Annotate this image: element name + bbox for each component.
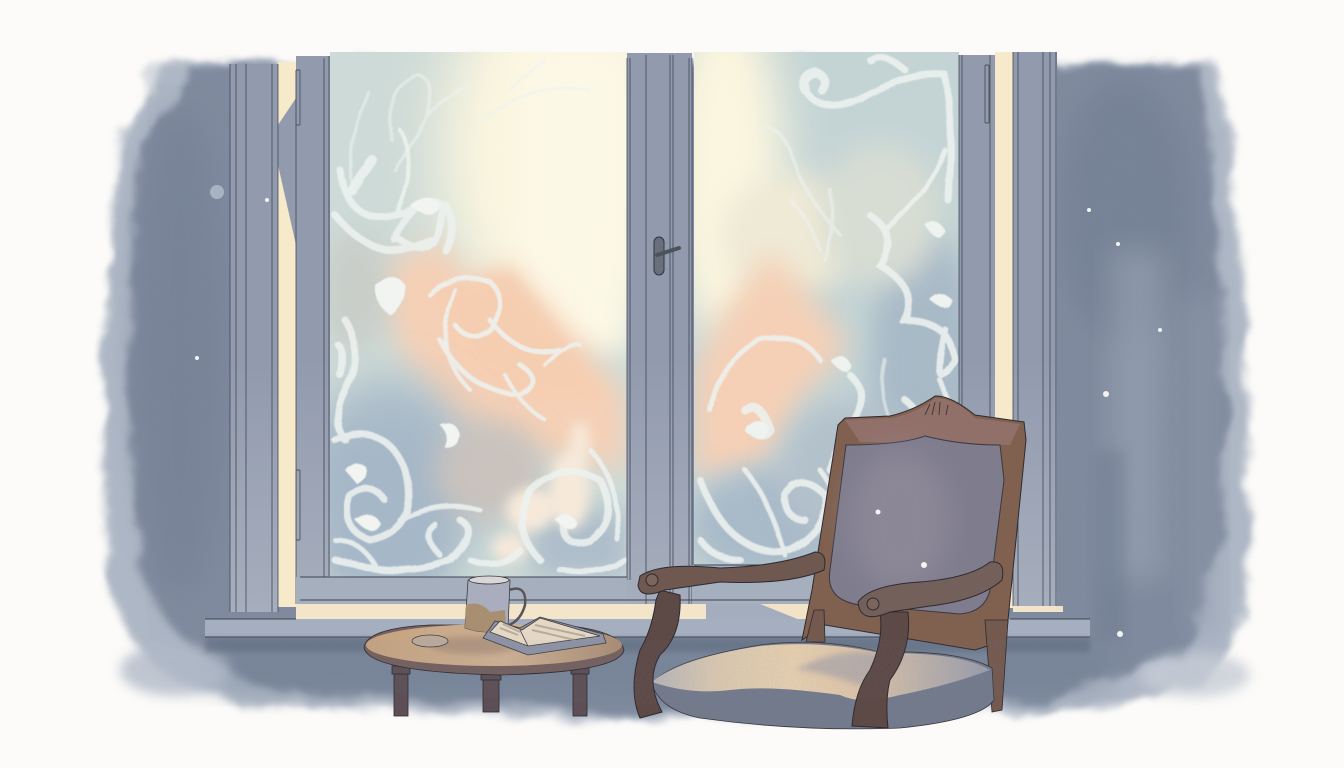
bottom rail of window [296, 565, 960, 605]
steam [492, 421, 590, 562]
window sill [205, 604, 1090, 652]
table legs [392, 666, 589, 716]
back frame [802, 396, 1026, 650]
upholstered back [829, 436, 1004, 614]
door handle [654, 237, 679, 275]
left frame [230, 56, 330, 612]
seat cushion [652, 642, 994, 729]
open book [483, 617, 606, 655]
table top [364, 625, 624, 675]
back legs [806, 610, 1008, 712]
illustration: armchair by a frosted window [95, 51, 1258, 730]
side table [364, 576, 624, 716]
paper grain on wall [150, 85, 1063, 704]
coaster [412, 635, 448, 647]
right arm and leg [852, 562, 1003, 728]
window [205, 0, 1090, 652]
crest carving [925, 402, 948, 415]
snow specks [195, 185, 1162, 637]
right pane [694, 52, 959, 564]
left arm and leg [634, 552, 825, 718]
armchair [634, 396, 1026, 729]
frost swirls left [335, 60, 625, 571]
right frame [959, 52, 1057, 610]
frost swirls right [700, 57, 955, 560]
frost blobs left [345, 198, 577, 531]
central mullion [627, 53, 692, 608]
mug [465, 576, 525, 632]
left pane [330, 52, 627, 576]
wall watercolor wash [102, 62, 1250, 720]
